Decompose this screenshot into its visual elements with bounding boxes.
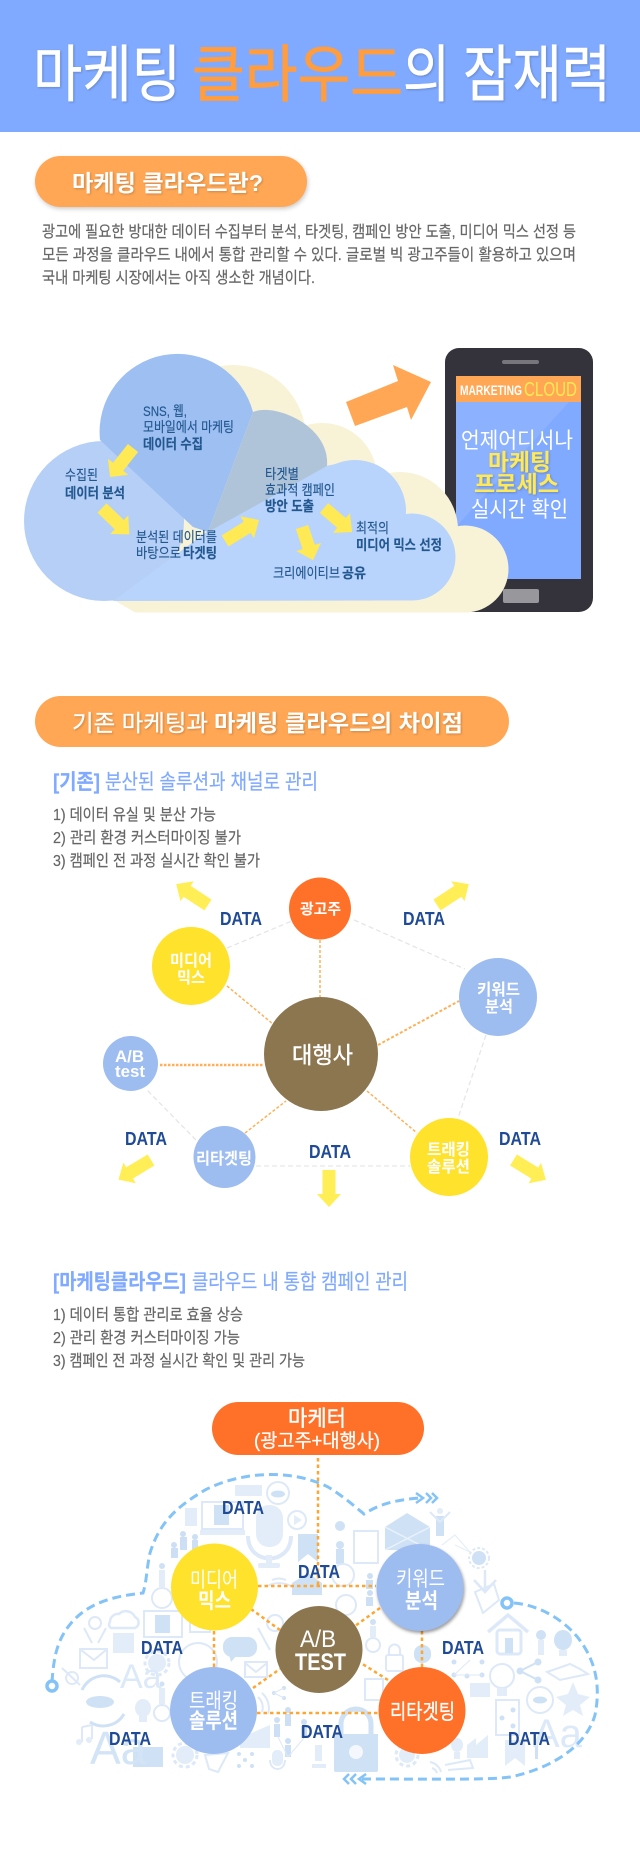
title: 잠재력 [463,41,611,110]
marketing cloud list: 3) 캠페인 전 과정 실시간 확인 및 관리 가능 [53,1352,305,1370]
step: campaign plan: 타겟별 [265,466,299,482]
step: media mix: 미디어 믹스 선정 [356,537,442,553]
data labels: DATA [508,1729,550,1749]
intro paragraph: 모든 과정을 클라우드 내에서 통합 관리할 수 있다. 글로벌 빅 광고주들이 활용하고 있으며 [42,246,576,264]
node: keyword analysis: 키워드 [477,981,520,999]
node: tracking solution [170,1667,257,1754]
subheading: marketing cloud: [마케팅클라우드] [53,1271,186,1294]
dashed cloud outline [47,1475,597,1784]
legacy list: 1) 데이터 유실 및 분산 가능 [53,806,216,824]
intro paragraph [42,223,576,287]
title: 마케팅 [33,41,181,110]
background icons: Aa [90,1722,147,1774]
node: media mix: 미디어 [190,1569,238,1592]
background icons: Aa [120,1658,162,1696]
subheading: marketing cloud: 클라우드 내 통합 캠페인 관리 [192,1271,408,1294]
node: A/B test [103,1036,158,1091]
marketing cloud list: 2) 관리 환경 커스터마이징 가능 [53,1329,240,1347]
subheading: legacy: [기존] [53,771,100,794]
section heading: what is marketing cloud: 마케팅 클라우드란? [72,170,263,196]
step: creative sharing: 크리에이티브 [273,565,340,581]
node: tracking solution [410,1118,488,1196]
legacy list: 2) 관리 환경 커스터마이징 불가 [53,829,241,847]
node: keyword analysis: 키워드 [396,1568,445,1591]
node: tracking solution: 트래킹 [189,1690,238,1713]
step: data collection: SNS, 웹, [143,403,187,419]
background icons [62,1482,590,1774]
pill: marketer [212,1402,424,1455]
data labels [109,1498,550,1749]
data labels: DATA [220,909,262,929]
step: media mix: 최적의 [356,520,389,536]
data labels: DATA [309,1142,351,1162]
data labels: DATA [141,1638,183,1658]
marketing cloud list: 1) 데이터 통합 관리로 효율 상승 [53,1306,243,1324]
step: targeting: 타겟팅 [183,545,217,561]
node: retargeting: 리타겟팅 [196,1150,252,1168]
step: campaign plan [265,466,335,514]
node: A/B test: A/B [300,1626,336,1653]
node: media mix: 믹스 [177,969,205,987]
node: agency: 대행사 [292,1042,353,1068]
step: data collection: 모바일에서 마케팅 [143,419,234,435]
connector lines [214,1458,422,1713]
intro paragraph: 광고에 필요한 방대한 데이터 수집부터 분석, 타겟팅, 캠페인 방안 도출, 미디어 믹스 선정 등 [42,223,576,241]
step: targeting: 바탕으로 [136,545,181,561]
legacy network diagram [103,874,552,1207]
subheading: marketing cloud [53,1271,408,1294]
intro paragraph: 국내 마케팅 시장에서는 아직 생소한 개념이다. [42,269,315,287]
step: targeting [136,529,217,561]
step: campaign plan: 효과적 캠페인 [265,482,335,498]
title [33,41,611,110]
icon: smartphone: MARKETING [460,382,522,398]
section heading: differences [35,696,509,747]
step: targeting: 분석된 데이터를 [136,529,217,545]
node: tracking solution: 솔루션 [427,1158,470,1176]
legacy list [53,806,260,870]
node: media mix: 미디어 [170,952,212,970]
node: A/B test [276,1606,362,1693]
node: retargeting: 리타겟팅 [390,1701,455,1724]
node: media mix [171,1544,258,1630]
icon: smartphone: CLOUD [524,379,577,401]
node: A/B test: TEST [295,1649,346,1676]
step: data collection [143,403,234,452]
node: A/B test: A/B [115,1047,144,1066]
node: media mix: 믹스 [198,1590,231,1613]
icon: smartphone: 프로세스 [474,471,559,497]
pill: marketer: 마케터 [288,1406,346,1431]
step: data collection: 데이터 수집 [143,436,203,452]
data labels: DATA [222,1498,264,1518]
node: keyword analysis [459,958,537,1036]
node: keyword analysis: 분석 [405,1590,438,1613]
data labels: DATA [403,909,445,929]
data flow arrows [112,874,552,1207]
node: media mix [152,927,230,1005]
section heading: what is marketing cloud [35,156,307,207]
node: retargeting [194,1126,256,1188]
pill: marketer: (광고주+대행사) [254,1430,380,1452]
data labels: DATA [125,1129,167,1149]
background icons: Aa [533,1712,583,1756]
data labels: DATA [301,1722,343,1742]
step: creative sharing: 공유 [342,565,366,581]
icon: smartphone: 언제어디서나 [461,428,573,453]
marketing cloud list [53,1306,305,1370]
node: keyword analysis [376,1544,464,1631]
node: A/B test: test [115,1062,145,1081]
header banner [0,0,640,132]
title: 클라우드 [192,41,403,110]
node: agency [264,997,378,1111]
title: 의 [403,41,450,110]
subheading: legacy: 분산된 솔루션과 채널로 관리 [105,771,318,794]
icon: smartphone: 실시간 확인 [471,497,568,522]
step: campaign plan: 방안 도출 [265,498,314,514]
node: tracking solution: 솔루션 [189,1710,238,1733]
data labels: DATA [298,1562,340,1582]
step: data analysis [65,467,125,501]
data labels [125,909,541,1162]
section heading: differences: 기존 마케팅과 [72,710,208,736]
data labels: DATA [442,1638,484,1658]
icon: smartphone [445,348,593,612]
integrated cloud diagram [47,1402,597,1784]
icon: smartphone: 마케팅 [488,449,551,475]
node: tracking solution: 트래킹 [427,1141,470,1159]
node: keyword analysis: 분석 [485,998,513,1016]
legacy list: 3) 캠페인 전 과정 실시간 확인 불가 [53,852,260,870]
data labels: DATA [109,1729,151,1749]
step: media mix [356,520,442,553]
process arrows [93,440,361,564]
section heading: differences: 마케팅 클라우드의 차이점 [214,710,463,736]
arrow: cloud to phone [346,365,431,426]
cloud diagram [24,354,508,612]
node: advertiser [289,878,351,940]
node: retargeting [378,1667,466,1754]
step: data analysis: 데이터 분석 [65,485,125,501]
data labels: DATA [499,1129,541,1149]
step: data analysis: 수집된 [65,467,98,483]
node: advertiser: 광고주 [300,901,341,918]
